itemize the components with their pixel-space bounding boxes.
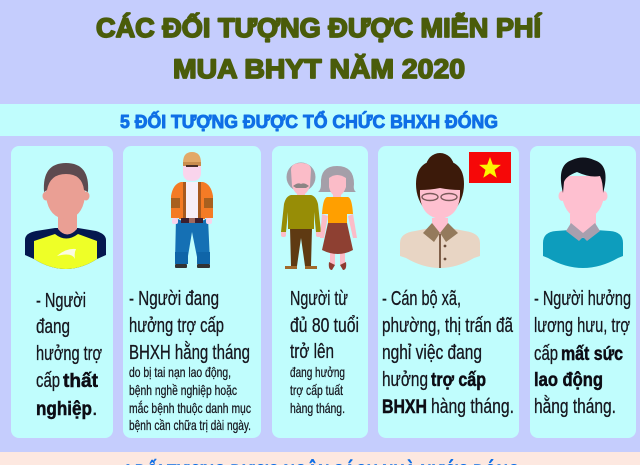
text: monthly allowance: - Người đang xyxy=(129,288,219,310)
section banner: next groups (cropped) xyxy=(0,452,640,465)
text: unemployed: . xyxy=(92,398,98,420)
panel: aged 80 and over xyxy=(272,146,368,438)
text: aged 80 and over: hàng tháng. xyxy=(290,400,345,416)
text: retired officials: BHXH xyxy=(382,397,427,418)
icon: man in teal sweater xyxy=(543,158,623,268)
panel: retired commune officials xyxy=(378,146,519,438)
panel: unemployed xyxy=(11,146,113,438)
title: MUA BHYT NĂM 2020 xyxy=(173,53,465,84)
icon: elderly couple xyxy=(281,162,357,270)
text: retired officials: hưởng xyxy=(382,369,428,391)
section banner: 5 groups xyxy=(0,104,640,136)
text: unemployed: - Người xyxy=(36,290,86,312)
text: monthly allowance: bệnh nghề nghiệp hoặc xyxy=(129,382,237,398)
panel: monthly social insurance allowance xyxy=(123,146,261,438)
text: aged 80 and over: Người từ xyxy=(290,288,348,310)
icon: Vietnam flag xyxy=(469,152,511,183)
text: monthly allowance xyxy=(129,288,251,433)
text: unemployed: cấp xyxy=(36,370,60,392)
text: monthly allowance: BHXH hằng tháng xyxy=(129,341,250,364)
text: monthly allowance: do bị tai nạn lao động, xyxy=(129,364,231,380)
text: retired officials: phường, thị trấn đã xyxy=(382,315,514,337)
text: unemployed: hưởng trợ xyxy=(36,343,102,365)
text: unemployed: thất xyxy=(63,371,99,392)
text: unemployed: đang xyxy=(36,316,70,338)
icon: woman with glasses xyxy=(400,153,480,268)
icon: man in yellow shirt xyxy=(25,163,106,269)
text: pensioners: lao động xyxy=(534,370,603,391)
text: aged 80 and over xyxy=(290,288,359,416)
text: monthly allowance: mắc bệnh thuộc danh mục xyxy=(129,400,251,416)
text: pensioners xyxy=(534,288,631,418)
text: aged 80 and over: trợ cấp tuất xyxy=(290,382,343,398)
text: unemployed xyxy=(36,290,102,420)
text: retired officials: - Cán bộ xã, xyxy=(382,288,461,310)
text: monthly allowance: hưởng trợ cấp xyxy=(129,315,224,337)
panel: pensioners xyxy=(530,146,636,438)
text: pensioners: cấp xyxy=(534,343,558,365)
section banner: 5 groups: 5 ĐỐI TƯỢNG ĐƯỢC TỔ CHỨC BHXH ĐÓNG xyxy=(120,111,498,132)
icon: construction worker xyxy=(171,152,213,268)
title: CÁC ĐỐI TƯỢNG ĐƯỢC MIỄN PHÍ xyxy=(96,11,542,43)
title xyxy=(96,11,542,84)
text: retired officials xyxy=(382,288,514,418)
text: retired officials: nghỉ việc đang xyxy=(382,342,482,364)
text: aged 80 and over: trở lên xyxy=(290,341,334,363)
text: pensioners: hằng tháng. xyxy=(534,395,616,418)
text: aged 80 and over: đang hưởng xyxy=(290,364,345,380)
text: retired officials: hàng tháng. xyxy=(431,396,514,418)
text: unemployed: nghiệp xyxy=(36,399,92,420)
text: retired officials: trợ cấp xyxy=(431,370,486,391)
text: pensioners: mất sức xyxy=(561,344,623,365)
text: monthly allowance: bệnh cần chữa trị dài ngày. xyxy=(129,417,251,433)
text: aged 80 and over: đủ 80 tuổi xyxy=(290,315,359,337)
